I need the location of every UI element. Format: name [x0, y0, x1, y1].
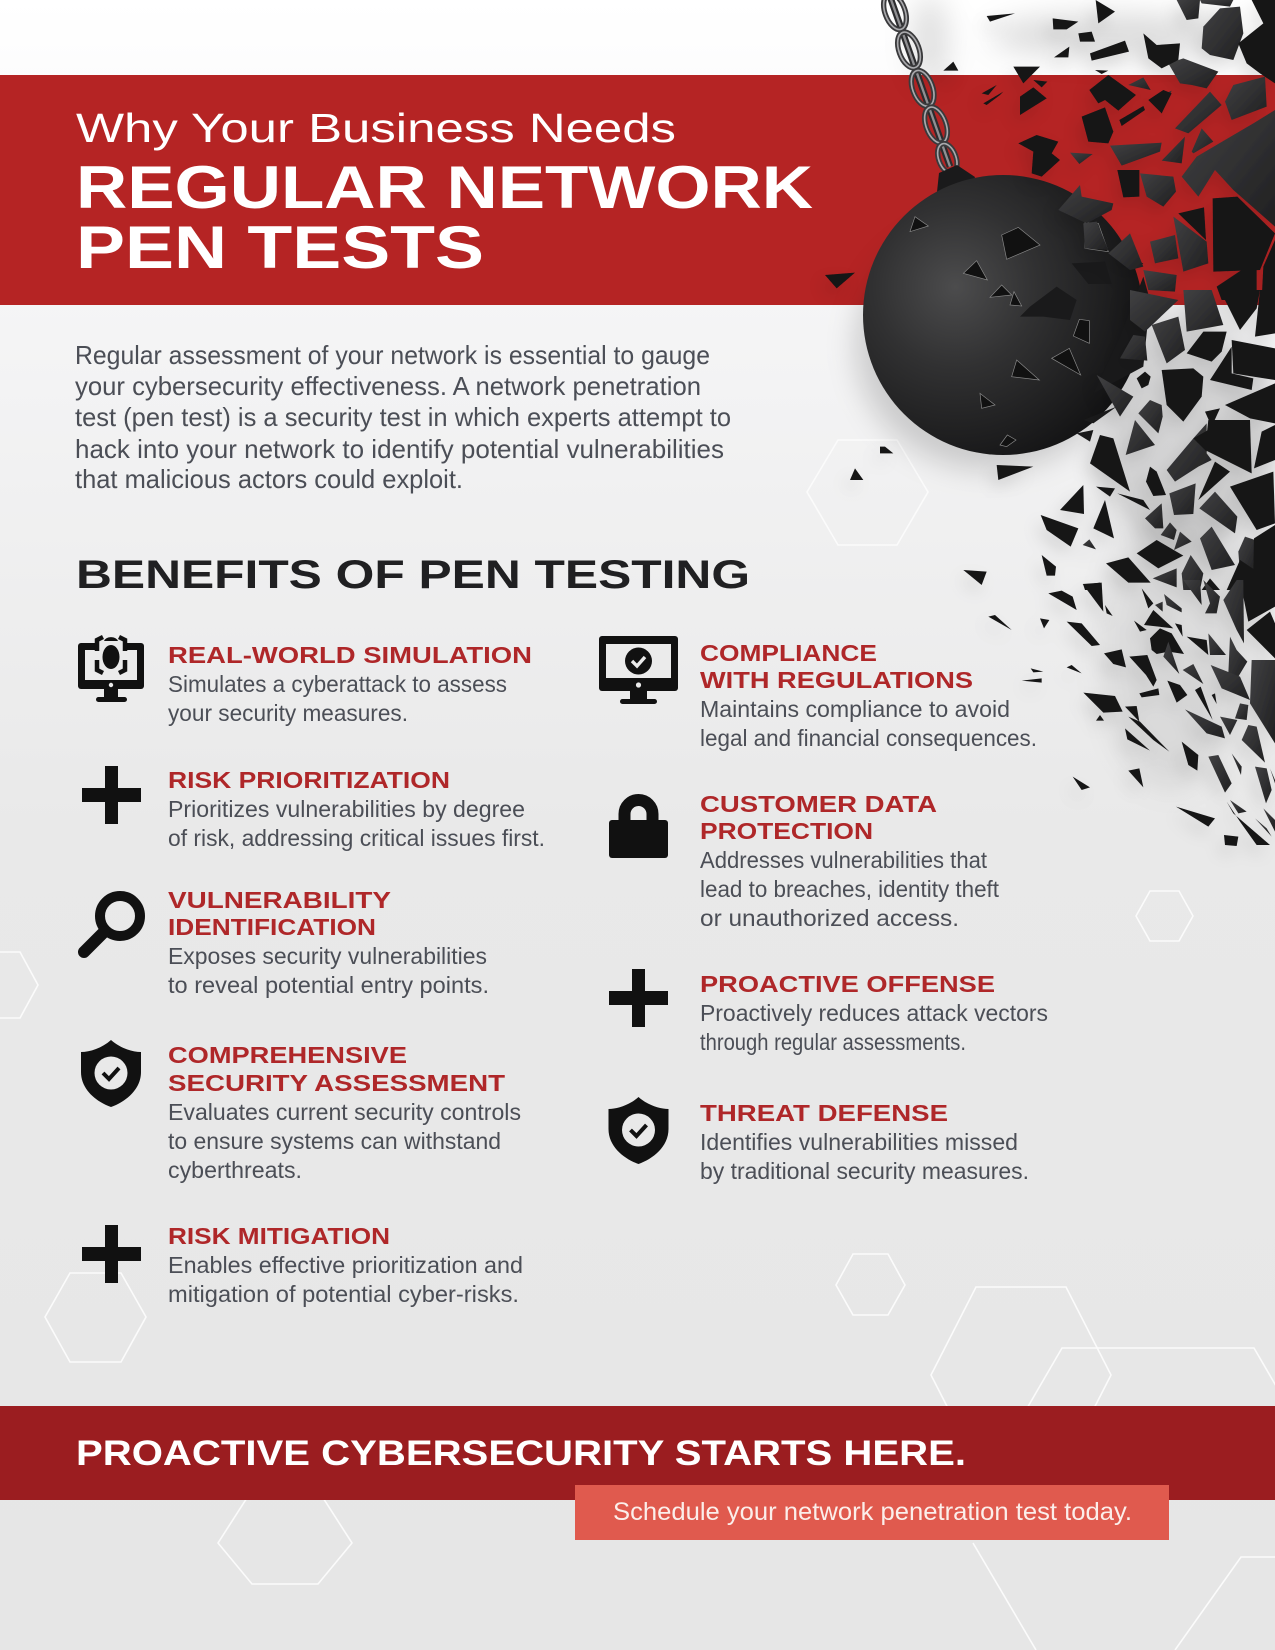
benefit: real-world simulation: your security measures.	[168, 700, 408, 726]
benefit: threat defense: by traditional security measures.	[700, 1158, 1029, 1184]
benefit: compliance with regulations: WITH REGULATIONS	[700, 667, 973, 693]
benefit: customer data protection: PROTECTION	[700, 818, 873, 844]
icon: plus	[609, 969, 668, 1027]
icon: shield check	[608, 1097, 668, 1164]
intro paragraph: test (pen test) is a security test in which experts attempt to	[75, 402, 731, 432]
benefit: risk prioritization: Prioritizes vulnerabilities by degree	[168, 796, 525, 822]
benefit: customer data protection: CUSTOMER DATA	[700, 791, 937, 817]
intro paragraph	[75, 340, 731, 494]
benefit: comprehensive security assessment: SECURITY ASSESSMENT	[168, 1070, 505, 1096]
benefit: proactive offense: Proactively reduces attack vectors	[700, 1000, 1048, 1026]
icon: monitor with bug	[78, 637, 144, 702]
icon: plus	[82, 766, 141, 824]
intro paragraph: Regular assessment of your network is essential to gauge	[75, 340, 710, 370]
footer band	[0, 1406, 1275, 1500]
header band	[0, 75, 1275, 305]
footer slogan: PROACTIVE CYBERSECURITY STARTS HERE.	[76, 1434, 966, 1473]
benefit: real-world simulation: Simulates a cyberattack to assess	[168, 671, 507, 697]
benefit: real-world simulation	[78, 637, 532, 726]
benefit: comprehensive security assessment: Evaluates current security controls	[168, 1099, 521, 1125]
benefit: customer data protection: lead to breaches, identity theft	[700, 876, 999, 902]
left-most fragments	[825, 13, 1060, 480]
lower-right fragments	[1040, 580, 1275, 846]
intro paragraph: that malicious actors could exploit.	[75, 464, 463, 494]
title	[76, 105, 813, 281]
upper-right fragments	[1033, 0, 1275, 300]
middle-right fragments	[1041, 290, 1275, 590]
icon: plus	[82, 1225, 141, 1283]
benefit: compliance with regulations: legal and financial consequences.	[700, 725, 1037, 751]
chain	[879, 0, 961, 176]
icon: padlock	[609, 800, 668, 858]
fragments on the ball	[910, 217, 1108, 447]
benefit: vulnerability identification	[84, 887, 489, 998]
ball cap	[937, 165, 975, 195]
wrecking ball	[863, 175, 1143, 455]
benefit: compliance with regulations	[599, 636, 1037, 751]
benefit: proactive offense	[609, 969, 1048, 1055]
icon: magnifier	[84, 896, 140, 952]
benefit: risk mitigation: RISK MITIGATION	[168, 1223, 390, 1249]
benefit: proactive offense: PROACTIVE OFFENSE	[700, 971, 995, 997]
benefit: risk prioritization: of risk, addressing critical issues first.	[168, 825, 545, 851]
benefit: vulnerability identification: VULNERABILITY	[168, 887, 391, 913]
benefit: comprehensive security assessment	[81, 1040, 521, 1183]
wrecking ball illustration	[825, 0, 1275, 846]
ball and fragment shadows	[855, 0, 1270, 790]
intro paragraph: hack into your network to identify potential vulnerabilities	[75, 434, 724, 464]
benefit: compliance with regulations: COMPLIANCE	[700, 640, 877, 666]
benefit: real-world simulation: REAL-WORLD SIMULATION	[168, 642, 532, 668]
benefit: comprehensive security assessment: cyberthreats.	[168, 1157, 302, 1183]
benefit: customer data protection: or unauthorized access.	[700, 905, 959, 931]
benefit: proactive offense: through regular assessments.	[700, 1029, 966, 1055]
benefit: threat defense: THREAT DEFENSE	[700, 1100, 948, 1126]
benefit: risk mitigation: Enables effective prioritization and	[168, 1252, 523, 1278]
call to action: Schedule your network penetration test today.	[613, 1498, 1132, 1526]
benefit: comprehensive security assessment: to ensure systems can withstand	[168, 1128, 501, 1154]
section heading: BENEFITS OF PEN TESTING	[76, 553, 750, 597]
call to action	[575, 1485, 1169, 1540]
benefit: compliance with regulations: Maintains compliance to avoid	[700, 696, 1010, 722]
benefit: customer data protection	[609, 791, 999, 931]
benefit: risk prioritization: RISK PRIORITIZATION	[168, 767, 450, 793]
benefit: vulnerability identification: IDENTIFICATION	[168, 914, 376, 940]
benefit: threat defense	[608, 1097, 1029, 1184]
flying fragments	[825, 0, 1275, 846]
darker shards along the ball edge	[1020, 253, 1150, 442]
title: PEN TESTS	[76, 214, 484, 281]
benefit: vulnerability identification: Exposes security vulnerabilities	[168, 943, 487, 969]
benefit: risk prioritization	[82, 766, 545, 851]
title: Why Your Business Needs	[76, 105, 676, 151]
benefit: risk mitigation	[82, 1223, 523, 1307]
benefit: risk mitigation: mitigation of potential cyber-risks.	[168, 1281, 519, 1307]
icon: shield check	[81, 1040, 141, 1107]
benefit: comprehensive security assessment: COMPREHENSIVE	[168, 1042, 407, 1068]
background hexagon pattern	[0, 440, 1275, 1650]
icon: monitor with check	[599, 636, 678, 704]
benefit: customer data protection: Addresses vulnerabilities that	[700, 847, 987, 873]
title: REGULAR NETWORK	[76, 154, 813, 221]
benefit: threat defense: Identifies vulnerabilities missed	[700, 1129, 1018, 1155]
benefit: vulnerability identification: to reveal potential entry points.	[168, 972, 489, 998]
intro paragraph: your cybersecurity effectiveness. A network penetration	[75, 371, 701, 401]
